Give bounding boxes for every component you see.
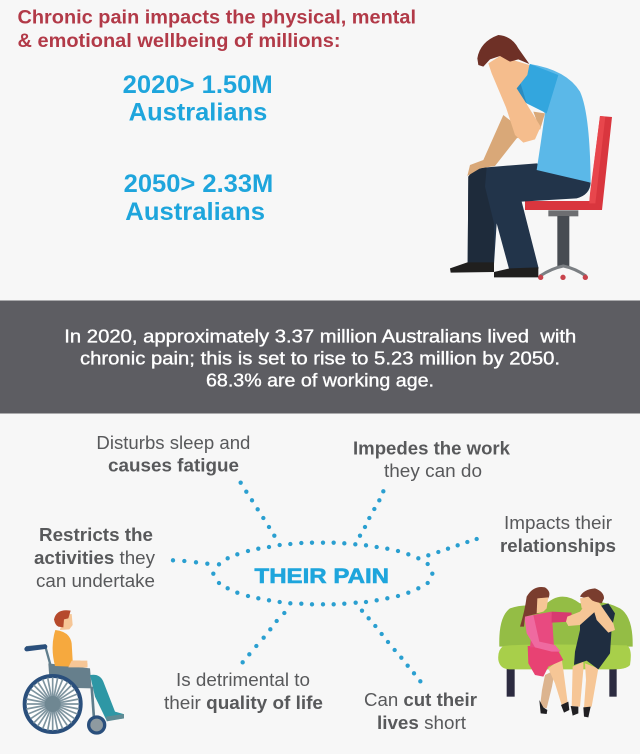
- statistic: 2020: [123, 71, 273, 127]
- dotted line: to work label: [358, 489, 385, 538]
- centre label: their pain: THEIR PAIN: [254, 565, 389, 588]
- statistic: 2050: Australians: [125, 198, 265, 226]
- heading: & emotional wellbeing of millions:: [18, 31, 340, 52]
- statistic: 2050: [124, 170, 273, 226]
- label: relationships: relationships: [500, 536, 616, 556]
- info band: chronic pain; this is set to rise to 5.23 million by 2050.: [80, 348, 560, 368]
- label: sleep and fatigue: Disturbs sleep and: [96, 433, 250, 453]
- label: activities: Restricts the: [39, 525, 153, 545]
- dotted line: to quality of life label: [240, 611, 286, 664]
- heading: [18, 7, 416, 52]
- dotted line: to activities label: [171, 558, 221, 566]
- label: sleep and fatigue: causes fatigue: [108, 456, 239, 476]
- label: sleep and fatigue: [96, 433, 250, 476]
- illustration: man in pain on chair: [450, 35, 612, 280]
- label: relationships: Impacts their: [504, 513, 612, 533]
- heading: Chronic pain impacts the physical, mental: [18, 7, 416, 28]
- label: lives short: lives short: [377, 713, 466, 733]
- info band: 68.3% are of working age.: [206, 371, 434, 391]
- info band: [0, 300, 640, 414]
- label: work: Impedes the work: [353, 438, 511, 458]
- label: work: [353, 438, 511, 481]
- dotted line: to sleep label: [238, 480, 276, 538]
- label: activities: activities they: [34, 548, 155, 568]
- dotted line: to lives short label: [360, 608, 422, 683]
- label: activities: [34, 525, 155, 591]
- label: lives short: Can cut their: [364, 690, 477, 710]
- label: quality of life: their quality of life: [164, 693, 323, 713]
- dotted line: to relationships label: [426, 537, 479, 557]
- statistic: 2020: Australians: [129, 99, 267, 127]
- illustration: person in wheelchair: [25, 610, 124, 733]
- dotted ellipse: [211, 540, 434, 606]
- statistic: 2020: 2020> 1.50M: [123, 71, 273, 99]
- statistic: 2050: 2050> 2.33M: [124, 170, 273, 198]
- label: relationships: [500, 513, 616, 556]
- label: quality of life: [164, 670, 323, 713]
- label: activities: can undertake: [36, 571, 155, 591]
- illustration: two women on a green sofa: [498, 587, 633, 717]
- label: lives short: [364, 690, 477, 733]
- label: quality of life: Is detrimental to: [176, 670, 310, 690]
- dotted diagram: their pain: [171, 480, 479, 683]
- info band: In 2020, approximately 3.37 million Australians lived with: [64, 326, 576, 346]
- label: work: they can do: [384, 461, 482, 481]
